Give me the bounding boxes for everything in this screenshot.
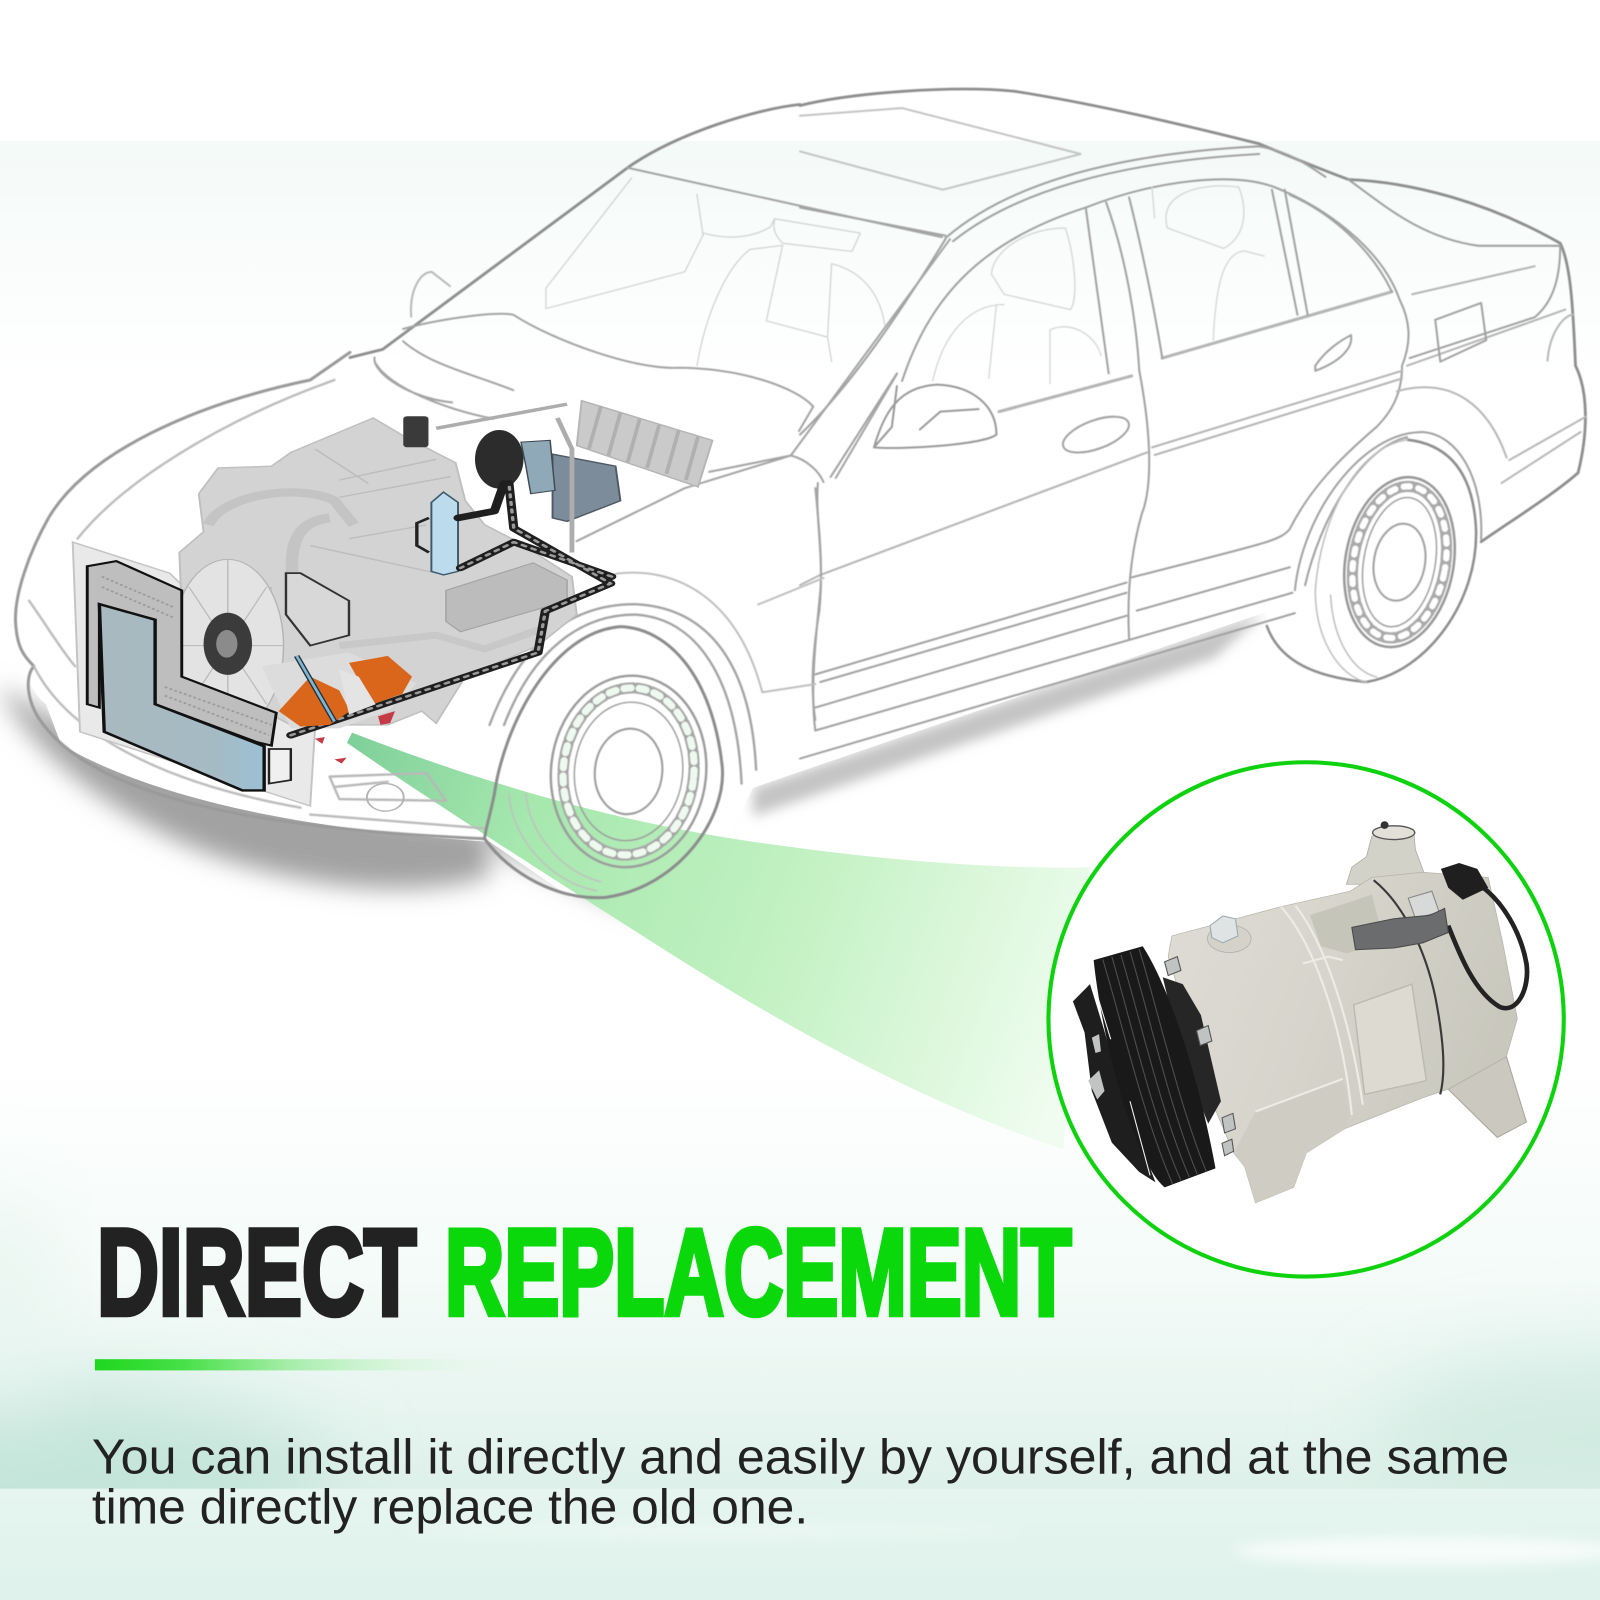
- rear tyre: [1267, 440, 1476, 682]
- dryer bracket: [417, 518, 429, 552]
- compressor photo illustration: [1073, 821, 1527, 1203]
- tail and bumper: [1397, 315, 1586, 483]
- front half outlines: [15, 352, 756, 898]
- discharge neck: [1346, 827, 1430, 884]
- housing seams: [1255, 906, 1363, 1115]
- front tyre inner wall: [509, 794, 601, 890]
- windshield and cowl: [350, 104, 950, 720]
- car line drawing: [15, 89, 1586, 898]
- hood rear edge: [577, 374, 897, 541]
- front rim: [541, 668, 716, 875]
- front support panel: [73, 542, 315, 806]
- wiring harness: [1448, 886, 1527, 1008]
- pulley: [1094, 946, 1215, 1187]
- description line 1: You can install it directly and easily by yourself, and at the same: [92, 1430, 1509, 1484]
- refrigerant pipe: [291, 483, 612, 735]
- front door and fender: [813, 488, 821, 720]
- roofline and rear silhouette: [800, 89, 1585, 542]
- fender contour: [615, 573, 823, 692]
- heading word: replacement: REPLACEMENT: [445, 1203, 1071, 1340]
- trunk line: [1348, 179, 1560, 358]
- reservoir cap: [403, 416, 428, 447]
- alternator: [286, 573, 349, 646]
- rear door handle: [1315, 335, 1351, 371]
- heading: [97, 1203, 1071, 1340]
- raised rib: [1354, 984, 1426, 1094]
- front door handle: [1058, 409, 1133, 460]
- condenser fins: [102, 577, 271, 735]
- car ground shadows: [0, 510, 1531, 910]
- upper connector: [1441, 863, 1488, 900]
- heading word: direct: DIRECT: [97, 1203, 416, 1340]
- housing shading: [1234, 1079, 1350, 1203]
- roof front edge: [350, 104, 800, 358]
- fog light and grille: [330, 773, 446, 801]
- receiver tank: [269, 749, 291, 784]
- mounting bolt: [1207, 916, 1251, 952]
- condenser outer frame: [87, 561, 276, 746]
- engine block: [179, 418, 577, 725]
- housing bolts: [1165, 957, 1235, 1156]
- clutch highlights: [1093, 980, 1150, 1175]
- seal ring: [1374, 880, 1443, 1094]
- neck bolt: [1381, 821, 1389, 829]
- sill lines: [800, 567, 1295, 759]
- intake hoses: [208, 492, 354, 525]
- receiver dryer: [431, 492, 458, 575]
- cabin seats and wheel: [546, 178, 885, 366]
- rear tyre inner: [1315, 440, 1407, 682]
- hose highlight: [297, 656, 334, 721]
- roof rails: [945, 146, 1326, 241]
- heater fins: [589, 406, 698, 480]
- seats behind side glass: [933, 186, 1264, 384]
- air box: [446, 563, 567, 632]
- clutch hub: [1073, 984, 1155, 1182]
- left wing mirror: [411, 272, 450, 317]
- windshield edges: [628, 168, 950, 456]
- radiator core: [99, 604, 264, 790]
- cowl line: [374, 314, 813, 431]
- rear half of the car: [800, 89, 1586, 759]
- blower motor: [475, 430, 523, 489]
- window pillars: [1086, 190, 1392, 373]
- engine bay illustration: [73, 401, 713, 811]
- car body fill: [17, 352, 1588, 898]
- engine texture: [252, 449, 451, 642]
- throttle hose: [292, 518, 330, 583]
- neck cap: [1373, 826, 1415, 840]
- hood and bumper outer line: [15, 352, 485, 839]
- door top and A pillar: [800, 179, 1409, 577]
- description text: [92, 1430, 1509, 1534]
- rear bracket: [1448, 1057, 1526, 1137]
- heater core: [577, 401, 713, 487]
- side mirror: [874, 385, 996, 448]
- door gap: [1128, 371, 1149, 639]
- rear wheel arch: [1295, 432, 1481, 590]
- divider gradient bar: [95, 1359, 523, 1370]
- clutch backplate: [1163, 977, 1221, 1124]
- sunroof: [800, 108, 1081, 190]
- clutch rivets: [1088, 1034, 1105, 1100]
- rear rim: [1331, 468, 1468, 656]
- expansion valve: [521, 440, 555, 494]
- fog light: [367, 784, 404, 811]
- hood inner line: [29, 380, 485, 828]
- evaporator: [553, 454, 620, 521]
- main housing: [1168, 872, 1517, 1203]
- bracket: [1408, 891, 1439, 919]
- red fittings: [315, 711, 395, 764]
- lower intake pipe: [339, 628, 543, 649]
- front door edge: [813, 483, 821, 731]
- orange compressor: [279, 656, 412, 727]
- front wheel arch: [490, 604, 756, 784]
- blue hose: [297, 656, 334, 721]
- window sill stripes: [999, 292, 1392, 412]
- upper pipes: [436, 404, 572, 552]
- engine fan: [172, 559, 284, 732]
- compressor callout circle: [1048, 762, 1564, 1277]
- fuel door: [1435, 303, 1486, 362]
- front tyre: [485, 627, 723, 898]
- body creases: [800, 266, 1565, 585]
- description line 2: time directly replace the old one.: [92, 1480, 808, 1534]
- recess above the rib: [1310, 895, 1385, 953]
- grey connector: [1352, 908, 1448, 950]
- green projection beam: [347, 733, 1090, 1149]
- compressor pulley backing: [262, 652, 417, 728]
